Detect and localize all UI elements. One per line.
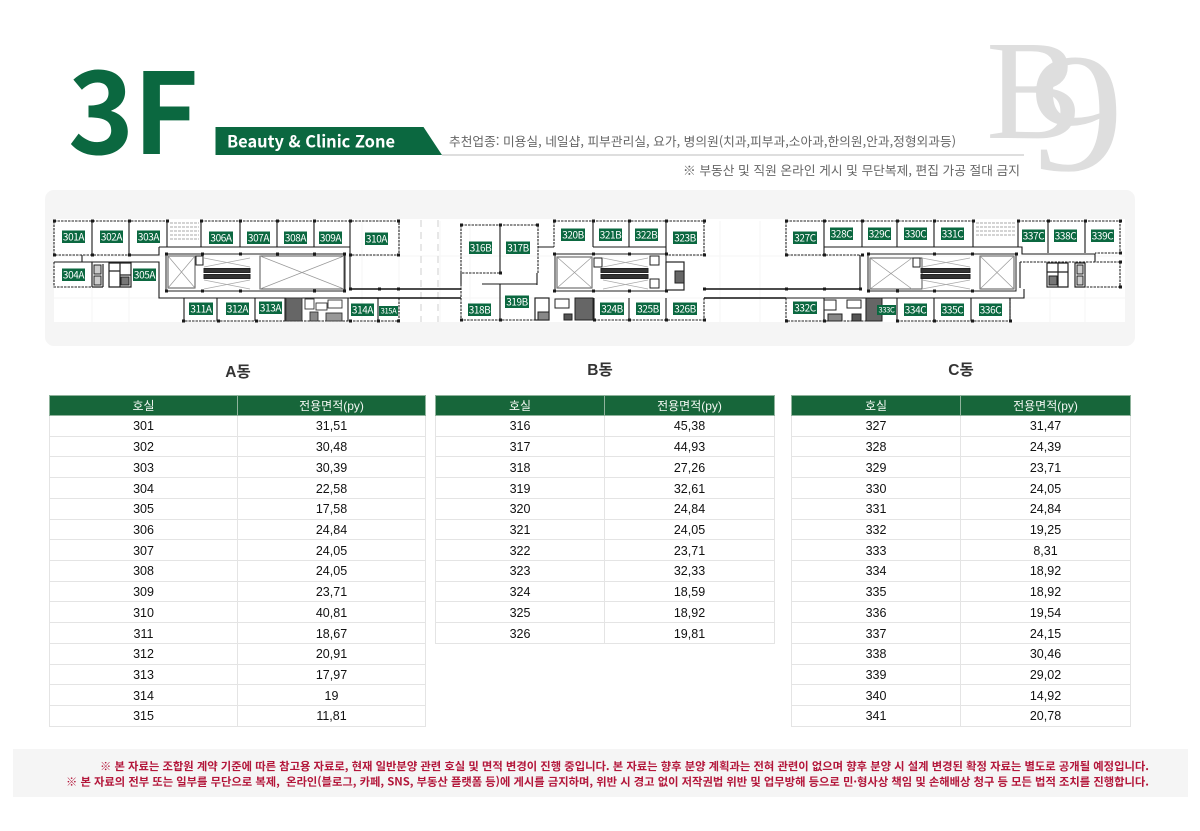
- table: A wing areas: 40,81: [316, 606, 347, 620]
- room label 313A: 313A: [260, 300, 282, 315]
- table: C wing areas: 329: [866, 461, 886, 475]
- plan: structural columns: [53, 221, 1122, 321]
- room label 327C: 327C: [794, 230, 817, 245]
- room label 335C: 335C: [942, 302, 964, 317]
- table: C wing areas: 339: [866, 668, 886, 682]
- table: C wing areas: 31,47: [1030, 419, 1061, 433]
- table: B wing areas: 325: [510, 606, 530, 620]
- room label 336C: 336C: [980, 302, 1002, 317]
- room label 329C: 329C: [869, 226, 891, 241]
- faint grid: [54, 221, 1125, 322]
- table: B wing areas: 321: [510, 523, 530, 537]
- footer disclaimer: ※ 본 자료는 조합원 계약 기준에 따른 참고용 자료로, 현재 일반분양 관련 호실 및 면적 변경이 진행 중입니다. 본 자료는 향후 분양 계획과는 전혀 관련이 없으며 향후 분양 시 설계 변경된 확정 자료는 별도로 공개될 예정입니다.: [100, 758, 1149, 774]
- table: A wing areas: 312: [133, 647, 154, 661]
- table: C wing areas: 20,78: [1030, 709, 1061, 723]
- table: A wing areas: 17,97: [316, 668, 347, 682]
- table: A wing areas: 22,58: [316, 482, 347, 496]
- table: A wing areas: 전용면적(py): [299, 399, 364, 413]
- room label 311A: 311A: [190, 301, 213, 316]
- footer disclaimer: [13, 749, 1188, 797]
- zone banner: [216, 127, 442, 155]
- table: B wing areas: 44,93: [674, 440, 705, 454]
- table: C wing areas: 341: [866, 709, 886, 723]
- room label 323B: 323B: [674, 230, 697, 245]
- table: A wing areas: 311: [134, 627, 153, 641]
- table: C wing areas: 337: [866, 627, 886, 641]
- table: C wing areas: 호실: [865, 399, 887, 413]
- room label 320B: 320B: [562, 227, 585, 242]
- plan: exterior dashed walls: [54, 221, 1120, 321]
- room label 314A: 314A: [352, 302, 374, 317]
- room label 325B: 325B: [637, 301, 660, 316]
- table: A wing areas: 309: [133, 585, 154, 599]
- table: A wing areas: 30,39: [316, 461, 347, 475]
- table: C wing areas: 24,05: [1030, 482, 1061, 496]
- room label 301A: 301A: [63, 229, 85, 244]
- heading: B wing: B동: [587, 362, 613, 379]
- table: A wing areas: [49, 395, 426, 727]
- room label 317B: 317B: [507, 240, 530, 255]
- table: A wing areas: 314: [133, 689, 154, 703]
- table: C wing areas: 24,39: [1030, 440, 1061, 454]
- room label 315A: 315A: [381, 306, 397, 317]
- table: C wing areas: 333: [866, 544, 886, 558]
- room label 310A: 310A: [366, 231, 388, 246]
- room label 321B: 321B: [600, 227, 622, 242]
- room label 326B: 326B: [674, 301, 697, 316]
- table: A wing areas: 305: [133, 502, 154, 516]
- table: A wing areas: 310: [133, 606, 154, 620]
- room label 312A: 312A: [227, 301, 249, 316]
- room label 305A: 305A: [134, 267, 156, 282]
- room label 306A: 306A: [210, 230, 233, 245]
- table: A wing areas: 24,05: [316, 564, 347, 578]
- table: B wing areas: 317: [510, 440, 530, 454]
- table: B wing areas: 323: [510, 564, 530, 578]
- table: C wing areas: 14,92: [1030, 689, 1061, 703]
- plan: connecting corridors: [350, 289, 860, 298]
- table: B wing areas: 319: [510, 482, 530, 496]
- table: A wing areas: 306: [133, 523, 154, 537]
- plan: A wing stairs and toilets: [170, 223, 342, 321]
- table: A wing areas: 304: [133, 482, 154, 496]
- table: C wing areas: 19,25: [1030, 523, 1061, 537]
- panel: floor plan: [45, 190, 1135, 346]
- table: C wing areas: 23,71: [1030, 461, 1061, 475]
- table: B wing areas: 전용면적(py): [657, 399, 722, 413]
- table: A wing areas: 24,84: [316, 523, 347, 537]
- table: C wing areas: 24,15: [1030, 627, 1061, 641]
- table: B wing areas: 32,33: [674, 564, 705, 578]
- table: B wing areas: 27,26: [674, 461, 705, 475]
- table: B wing areas: 호실: [509, 399, 531, 413]
- table: A wing areas: 302: [133, 440, 154, 454]
- table: B wing areas: 320: [510, 502, 530, 516]
- table: A wing areas: 31,51: [316, 419, 347, 433]
- room label 309A: 309A: [320, 230, 342, 245]
- plan: A wing core: [92, 254, 345, 291]
- table: C wing areas: 336: [866, 606, 886, 620]
- table: C wing areas: 18,92: [1030, 585, 1061, 599]
- table: B wing areas: 326: [510, 627, 530, 641]
- room label 339C: 339C: [1092, 228, 1114, 243]
- table: A wing areas: 18,67: [316, 627, 347, 641]
- table: C wing areas: 330: [866, 482, 886, 496]
- table: B wing areas: 18,92: [674, 606, 705, 620]
- title: floor number: 3F: [68, 25, 198, 187]
- table: A wing areas: 301: [133, 419, 154, 433]
- table: C wing areas: 30,46: [1030, 647, 1061, 661]
- room label 332C: 332C: [794, 300, 817, 315]
- room label 324B: 324B: [601, 301, 624, 316]
- table: B wing areas: 322: [510, 544, 530, 558]
- table: A wing areas: 307: [133, 544, 154, 558]
- heading: C wing: C동: [948, 362, 974, 379]
- room label 318B: 318B: [469, 302, 491, 317]
- room label 322B: 322B: [636, 227, 658, 242]
- table: A wing areas: 315: [133, 709, 154, 723]
- table: C wing areas: 340: [866, 689, 886, 703]
- table: A wing areas: 11,81: [316, 709, 347, 723]
- table: B wing areas: [435, 395, 775, 644]
- plan: C wing core: [824, 223, 1085, 321]
- table: B wing areas: 18,59: [674, 585, 705, 599]
- zone banner: Beauty & Clinic Zone: [227, 128, 395, 152]
- header rule: [442, 154, 1024, 156]
- table: A wing areas: 호실: [132, 399, 155, 413]
- table: B wing areas: 19,81: [674, 627, 705, 641]
- room label 302A: 302A: [101, 229, 123, 244]
- room label 303A: 303A: [138, 229, 160, 244]
- plan: solid walls and partitions: [54, 221, 1095, 321]
- table: C wing areas: 전용면적(py): [1013, 399, 1078, 413]
- table: A wing areas: 303: [133, 461, 154, 475]
- room label 308A: 308A: [285, 230, 307, 245]
- table: B wing areas: 24,05: [674, 523, 705, 537]
- room label 316B: 316B: [470, 240, 492, 255]
- room label 307A: 307A: [248, 230, 270, 245]
- heading: A wing: A동: [225, 364, 251, 381]
- room label 330C: 330C: [905, 226, 927, 241]
- table: A wing areas: 17,58: [316, 502, 347, 516]
- table: A wing areas: 19: [325, 689, 338, 703]
- table: A wing areas: 308: [133, 564, 154, 578]
- recommended business types text: 추천업종: 미용실, 네일샵, 피부관리실, 요가, 병의원(치과,피부과,소아과,한의원,안과,정형외과등): [449, 131, 956, 150]
- table: C wing areas: 29,02: [1030, 668, 1061, 682]
- table: C wing areas: 335: [866, 585, 886, 599]
- table: A wing areas: 20,91: [316, 647, 347, 661]
- table: B wing areas: 324: [510, 585, 530, 599]
- table: A wing areas: 313: [133, 668, 154, 682]
- logo: B9 monogram: [986, 30, 1124, 180]
- room label 304A: 304A: [63, 267, 85, 282]
- table: B wing areas: 316: [510, 419, 530, 433]
- table: C wing areas: [791, 395, 1131, 727]
- table: C wing areas: 332: [866, 523, 886, 537]
- room label 337C: 337C: [1023, 228, 1045, 243]
- room label 338C: 338C: [1055, 228, 1077, 243]
- table: A wing areas: 23,71: [316, 585, 347, 599]
- table: C wing areas: 19,54: [1030, 606, 1061, 620]
- room label 319B: 319B: [506, 294, 529, 309]
- footer disclaimer: ※ 본 자료의 전부 또는 일부를 무단으로 복제, 온라인(블로그, 카페, SNS, 부동산 플랫폼 등)에 게시를 금지하며, 위반 시 경고 없이 저작권법 위반 및 업무방해 등으로 민·형사상 책임 및 손해배상 청구 등 모든 법적 조치를 진행합니다.: [66, 774, 1149, 790]
- table: B wing areas: 45,38: [674, 419, 705, 433]
- plan: B wing core: [535, 254, 684, 320]
- copy prohibition note: ※ 부동산 및 직원 온라인 게시 및 무단복제, 편집 가공 절대 금지: [683, 160, 1020, 179]
- table: C wing areas: 18,92: [1030, 564, 1061, 578]
- room label 331C: 331C: [942, 226, 964, 241]
- table: B wing areas: 23,71: [674, 544, 705, 558]
- table: C wing areas: 8,31: [1033, 544, 1058, 558]
- room label 333C: 333C: [879, 305, 895, 316]
- room label 334C: 334C: [905, 302, 927, 317]
- table: A wing areas: 24,05: [316, 544, 347, 558]
- table: C wing areas: 331: [866, 502, 886, 516]
- table: C wing areas: 334: [866, 564, 886, 578]
- table: B wing areas: 318: [510, 461, 530, 475]
- table: A wing areas: 30,48: [316, 440, 347, 454]
- table: B wing areas: 32,61: [674, 482, 705, 496]
- table: B wing areas: 24,84: [674, 502, 705, 516]
- room label 328C: 328C: [831, 226, 853, 241]
- table: C wing areas: 338: [866, 647, 886, 661]
- table: C wing areas: 327: [866, 419, 886, 433]
- table: C wing areas: 24,84: [1030, 502, 1061, 516]
- table: C wing areas: 328: [866, 440, 886, 454]
